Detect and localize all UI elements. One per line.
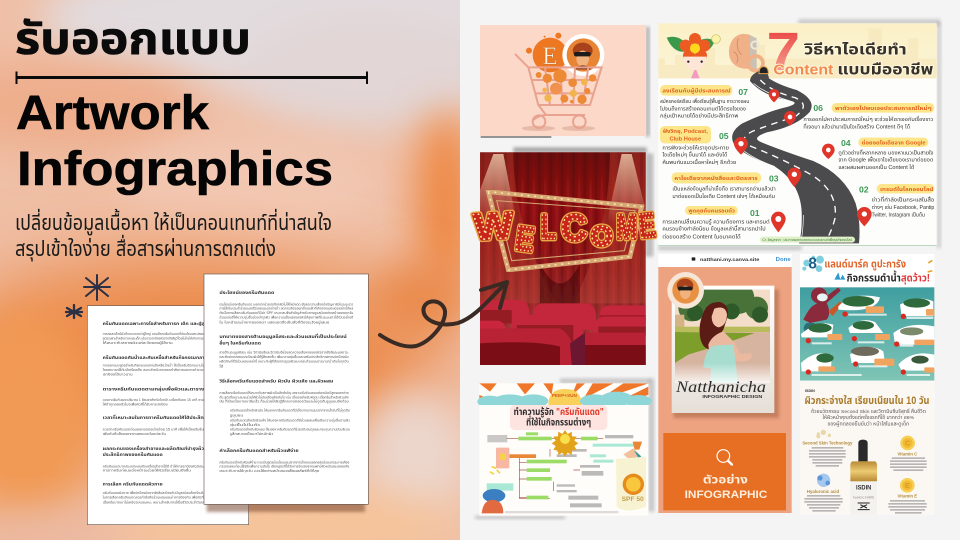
- document: right page: รูขุมขน: [229, 414, 243, 418]
- panel: island landmarks infographic: [800, 254, 934, 515]
- infographic title: Content: [773, 62, 833, 78]
- title box: ทำความรู้จัก "ครีมกันแดด": [514, 405, 604, 418]
- document: left page: [87, 306, 249, 525]
- welcome sign lettering: C: [561, 207, 587, 248]
- document: left page: การออกแบบสูตรสำหรับกิจกรรมกลางแจ้งหรือว่ายน้ำ ให้เนื้อครีมติดทนนานไม่หลุดง่าย: [103, 363, 216, 368]
- product: serum bottle: FLAVO-C FORTE: [853, 496, 874, 500]
- welcome sign lettering: E: [513, 219, 536, 260]
- source note: [760, 237, 855, 243]
- step 01: การแลกเปลี่ยนความรู้ ความต้องการ และเทรนด์: [662, 217, 770, 225]
- serum description: ของผู้ทดลองยืนยันว่า หน้าใสในและดูเด็ก: [827, 420, 909, 427]
- browser bar: Done: [776, 257, 791, 263]
- document: right page: ครีมกันแดดสำหรับผิวผสม ให้มองหาครีมกันแดดที่ช่วยปรับสมดุลและควบคุมความมันบริเวณ: [230, 426, 350, 431]
- feature: second skin: Second Skin Technology: [802, 441, 853, 446]
- big numeral 7: 7: [767, 23, 800, 82]
- icon: avatar badge: [562, 34, 604, 76]
- script name: Natthanicha: [675, 379, 766, 396]
- step 04: ต่อยอดไอเดียจาก Google: [862, 139, 926, 147]
- orange call-to-action box: ตัวอย่าง: [703, 474, 748, 487]
- serum description: [811, 408, 926, 427]
- document: right page: นั้น ที่เป็นเนื้อบางเบาซึมเร็ว ก็จะช่วยให้ผิวรู้สึกสบายตลอดวันและไม่อุดตันรูขุมขนอีกด้วย: [219, 399, 349, 404]
- welcome sign lettering: E: [637, 206, 657, 246]
- marquee frame: [488, 192, 642, 270]
- icon: sun with UV label: [552, 430, 578, 457]
- step 04: [838, 138, 934, 171]
- step 05: Club House: [669, 136, 701, 142]
- document: right page: และยังช่วยปลอบประโลมผิวให้รู้สึกสดชื่น เพิ่มความชุ่มชื้นและเสริมประสิทธิภาพการปกป้องผิว: [219, 354, 349, 359]
- step 03: เป็นแหล่งข้อมูลที่น่าเชื่อถือ เราสามารถอ่านแล้วนำ: [672, 185, 776, 193]
- document: left page: เวลาที่เหมาะสมในการทาครีมกันแดดให้ได้ประสิทธิภาพ: [103, 414, 217, 420]
- panel: cart illustration: [480, 25, 650, 138]
- document: left page: ตารางครีมกันแดดตามกลุ่มเพื่อผิวและตารางทาซ้ำ: [103, 385, 216, 393]
- welcome sign lettering: W: [473, 205, 514, 248]
- avatar badge: [667, 272, 704, 309]
- panel: serum product infographic: [800, 381, 934, 515]
- document: left page: การทาครีมก่อนแต่งหน้าจะช่วยให้ผิวเรียบเนียนยิ่งขึ้น: [103, 468, 191, 473]
- document: left page: ประสิทธิภาพของครีมกันแดด: [103, 451, 163, 457]
- step 04: 04: [841, 138, 851, 148]
- step 04: จาก Google เพื่อเอาไอเดียของเรามาต่อยอด: [838, 156, 933, 164]
- feature: vitamin E: E: [905, 481, 910, 490]
- step 02: Twitter, Instagram เป็นต้น: [872, 212, 925, 219]
- step 02: เทรนด์ในโลกออนไลน์: [880, 187, 934, 193]
- browser bar: natthani.my.canva.site: [700, 257, 760, 262]
- step 03: หาไอเดียจากหนังสือและนิตยสาร: [674, 175, 758, 182]
- document: right page: สารต้านอนุมูลอิสระ เช่น วิตามินซีและวิตามินอีช่วยลดความเสียหายของผิวจากรังสีและมลภาวะ: [219, 350, 349, 354]
- document: left page: ทารกและเด็กมีผิวที่บอบบางกว่าผู้ใหญ่ ควรเลือกครีมกันแดดที่อ่อนโยนและปลอดภัยต่อผิว: [103, 331, 216, 336]
- orange call-to-action box: [663, 433, 786, 510]
- document: right page: ประโยชน์ของครีมกันแดด นอกจากช่วยปกป้องผิวไม่ให้ไหม้แดด ยังลดความเสี่ยงต่อปัญหาผิวในระยะยาว: [219, 301, 354, 306]
- welcome sign lettering: M: [616, 209, 637, 247]
- icon: large asterisk: [84, 275, 110, 300]
- step 05: ค้นพบกับแนวเนื้อหาใหม่ๆ อีกด้วย: [662, 158, 736, 166]
- serum description: ด้วยนวัตกรรม Second Skin และวิตามินซีบริสุทธิ์ คืนชีวิต: [811, 408, 926, 415]
- step 07: ลงเรียนกับผู้มีประสบการณ์: [662, 87, 731, 94]
- diver: [803, 287, 843, 331]
- step 01: คนรอบข้างกำลังนิยม ข้อมูลเหล่านี้สามารถนำไป: [662, 225, 766, 233]
- document: right page: ดังนั้นการเลือกครีมกันแดดที่มีค่า SPF เหมาะสมจึงสำคัญสำหรับการดูแลผิวอย่างสม่ำเสมอทุกวัน: [219, 310, 353, 315]
- welcome sign lettering: L: [541, 209, 556, 247]
- document: right page: ครีมกันแดดสำหรับผิวแพ้ง่าย ควรเป็นสูตรอ่อนโยนและปราศจากน้ำหอมแอลกอฮอล์และสารระคายเคือง: [219, 459, 350, 464]
- arrow: curly arrow from documents to samples: [380, 282, 507, 346]
- footnote: [505, 511, 618, 513]
- step 02: [859, 184, 934, 219]
- document: left page: ปกป้องได้ยาวนาน: [103, 373, 133, 377]
- step 06: [803, 103, 934, 130]
- document: right page: ครีมกันแดดสำหรับผิวมัน ให้มองหาครีมกันแดดที่มีเนื้อบางเบาและปราศจากน้ำมันที่ไม่อุดตัน: [230, 408, 350, 413]
- step 05: [660, 126, 736, 166]
- islands title: 8: [808, 256, 817, 273]
- feature: vitamin C: C: [905, 439, 911, 448]
- document: left page: ให้ทำทุกสองชั่วโมงเพื่อผิวที่ได้รับการปกป้อง: [103, 402, 168, 407]
- browser bar: [692, 257, 791, 263]
- panel: blurred orange gradient background: [0, 0, 460, 540]
- welcome sign lettering: O: [591, 220, 612, 251]
- panel: serum product infographic: ISDIN: [805, 389, 815, 393]
- welcome sign lettering: W: [473, 205, 514, 248]
- step 06: การออกไปหาประสบการณ์ใหม่ๆ จะช่วยให้เราเจอกับเรื่องราว: [803, 115, 934, 123]
- panel: sunscreen mind map infographic: [475, 378, 654, 519]
- polaroid photo: [672, 282, 779, 418]
- step 05: 05: [719, 131, 729, 141]
- document: right page: ใน ใบหน้าและร่างกายของเรา แสงแดดจึงเป็นสิ่งที่ต้องระวังอยู่เสมอ: [219, 319, 330, 324]
- islands title: แลนด์มาร์ค ดูปะการัง: [824, 258, 906, 270]
- welcome sign lettering: E: [513, 219, 536, 260]
- document: right page: ชุ่มชื้นไปในตัว: [230, 422, 261, 427]
- step 06: ที่เจอมา แล้วนำมาเป็นไอเดียสร้าง Content ดีๆ ได้: [803, 122, 910, 130]
- step 07: กลุ่มเป้าหมายได้อย่างมีประสิทธิภาพ: [660, 113, 739, 120]
- welcome sign lettering: M: [616, 209, 637, 247]
- sea map: [800, 287, 934, 381]
- map pins: [734, 89, 872, 232]
- title: Infographics: Infographics: [17, 143, 333, 196]
- welcome sign lettering: L: [541, 209, 556, 247]
- document: left page: ผลกระทบของเครื่องสำอางและผลิตภัณฑ์บำรุงผิวที่ช่วย: [103, 444, 216, 452]
- step 07: 07: [738, 87, 748, 97]
- welcome sign lettering: C: [561, 207, 587, 248]
- step 01: พูดคุยกับคนรอบตัว: [688, 208, 735, 215]
- source note: Cr. ข้อมูลจาก : ประกาศผลงานออกแบบคอนเทนต์เพื่อธุรกิจออนไลน์: [762, 237, 852, 242]
- document: left page: ครีมกันแดดกันน้ำและกันเหงื่อสำหรับกิจกรรมกลางแจ้ง: [103, 354, 217, 360]
- panel: sunscreen mind map infographic: PEEP+SUN: [552, 393, 577, 398]
- bubbles: [802, 256, 824, 272]
- document: left page: ควรทาครีมกันแดดปริมาณ 1 ช้อนชาสำหรับใบหน้า เครื่องทีแดด 15 นาที ตามคำแนะนำ: [103, 397, 217, 402]
- serum description: ให้ผิวหน้าคุณตั้งแต่ครั้งแรกที่ใช้ มากกว่า 86%: [822, 413, 915, 421]
- curtain: [480, 152, 646, 365]
- feature: vitamin C: Vitamin C: [897, 451, 917, 456]
- icon: SPF 50 bottle: [616, 457, 646, 510]
- step 01: [662, 206, 770, 240]
- document: left page: สูตรเฉพาะสำหรับทารกและเด็ก เน้นการปกป้องผิวจากรังสียูวีโดยไม่ก่อให้เกิดการระคายเคือง: [102, 335, 216, 340]
- feature: hyaluronic acid: Hyaluronic acid: [807, 489, 839, 494]
- document: left page: ในการเลือกครีมกันแดดควรคำนึงถึงส่วนผสมและค่าการป้องกัน เพื่อผิวที่เหมาะสม: [103, 495, 216, 500]
- step 07: ไปจนถึงการสร้างคอนเทนต์ได้ตรงใจของ: [659, 105, 746, 112]
- document: right page: ได้: [218, 364, 223, 368]
- sun rays: [479, 383, 648, 406]
- feature: vitamin E: [888, 478, 927, 514]
- step 06: พาตัวเองไปพบเจอประสบการณ์ใหม่ๆ: [835, 104, 932, 112]
- panel: portfolio card: [658, 254, 792, 513]
- islands title: [808, 256, 930, 284]
- feature: vitamin E: Vitamin E: [898, 494, 917, 499]
- islands title: กิจกรรมดำน้ำสุดว้าว!: [847, 269, 930, 284]
- document: right page: ส่วนผสมที่ให้ความชุ่มชื้นช่วยบำรุงผิว เพื่อความแข็งแรงของผิวให้สุขภาพดีในระยะยาวได้เป็นอย่างดี: [219, 315, 353, 320]
- welcome sign lettering: E: [637, 206, 657, 246]
- step 03: มาต่อยอดเป็นไอเดีย Content เจ๋งๆ ได้เหมือนกัน: [672, 193, 775, 200]
- document: right page: ครีมกันแดดสำหรับผิวแห้ง ให้มองหาครีมกันแดดที่มีส่วนผสมเพื่อเติมความชุ่มชื้นตามผิว: [230, 417, 350, 422]
- document: right page: เหมาะกับการใช้ทุกวัน ควรใช้อย่างสม่ำเสมอเพื่อผลลัพธ์ที่ดีที่สุด: [219, 468, 319, 473]
- step 06: 06: [813, 103, 823, 113]
- skyline: [658, 28, 937, 78]
- icon: small asterisk: [66, 305, 82, 318]
- welcome sign lettering: E: [637, 206, 657, 246]
- welcome sign lettering: O: [591, 220, 612, 251]
- welcome sign lettering: C: [561, 207, 587, 248]
- step 04: และผสมผสานออกเป็น Content ได้: [838, 164, 914, 171]
- subtitle text: [15, 208, 332, 262]
- step 01: 01: [750, 208, 760, 218]
- icon: orange E badge: E: [542, 42, 558, 70]
- document: right page: คำเลือกครีมกันแดดสำหรับผิวแพ้ง่าย: [219, 446, 299, 453]
- icon: brain and gears: [729, 34, 763, 71]
- document: right page: ประโยชน์ของครีมกันแดด: [219, 289, 275, 295]
- icon: magnifier: [717, 450, 732, 465]
- clouds: [477, 392, 652, 408]
- infographic title: [773, 42, 934, 78]
- document: left page: เพิ่มกันที่แข็งแรงจากแสงแดดในแต่ละวัน: [103, 431, 166, 436]
- infographic title: แบบมืออาชีพ: [837, 62, 934, 78]
- step 04: ดูตัวอย่างที่หลากหลาย มองหาแนวเป็นสายใจ: [838, 148, 934, 156]
- document: left page: เนื้อครีมบางเบาไม่เหนียวเหนอะหนะ เหมาะสำหรับการใช้ในชีวิตประจำวันของทุกคน: [103, 499, 216, 504]
- document: right page: รูสึกสบายเนื้อเบาไม่หนักผิว: [229, 431, 274, 436]
- step 02: ต่างๆ เช่น Facebook, Pantip: [872, 204, 934, 211]
- step 07: [659, 85, 749, 120]
- title box: [510, 405, 607, 430]
- panel: 7 content ideas road infographic: [658, 19, 941, 250]
- subtitle text: เปลี่ยนข้อมูลเนื้อหา ให้เป็นคอนเทนท์ที่น่าสนใจ: [15, 208, 332, 236]
- document: left page: ครีมกันแดดบางประเภทผสมกับเครื่องสำอางได้ดี ทำให้การปกป้องผิวมีประสิทธิภาพ: [103, 463, 217, 468]
- document: right page: อื่นๆ ในครีมกันแดด: [219, 340, 261, 346]
- document: right page: [204, 274, 368, 512]
- document: right page: บทบาทของสารต้านอนุมูลอิสระและส่วนผสมที่เป็นประโยชน์: [219, 332, 347, 340]
- icon: SPF 50 bottle: SPF 50: [622, 496, 644, 503]
- document: right page: การเลือกครีมกันแดดให้เหมาะกับสภาพผิวเป็นสิ่งสำคัญ เพราะครีมกันแดดแต่ละชนิดมีสูตรแตกต่าง: [219, 390, 349, 395]
- step 02: ข่าวที่กำลังเป็นกระแสในสื่อ: [872, 196, 934, 204]
- mind map: [487, 432, 634, 507]
- document: right page: วิธีเลือกครีมกันแดดสำหรับ ผิวมัน ผิวแห้ง และผิวผสม: [219, 378, 334, 384]
- step 03: [672, 172, 779, 200]
- document: right page: การใช้เป็นประจำช่วยชะลอริ้วรอยและจุดด่างดำ ลดการเกิดรอยคล้ำและฝ้าที่เกิดจากแสงแดดอย่างได้ผล: [219, 306, 354, 311]
- panel: welcome theatre: [480, 147, 653, 365]
- welcome sign lettering: E: [513, 219, 536, 260]
- icon: sunscreen tube: [490, 448, 509, 474]
- title: รับออกแบบ: รับออกแบบ: [15, 15, 251, 64]
- feature: vitamin C: [890, 436, 927, 471]
- document: right page: ผลิตภัณฑ์ที่มีส่วนผสมเหล่านี้ เหมาะกับผู้ที่ต้องการดูแลผิวแบบครบถ้วนและยาวนานกว่าเดิมในทุกวัน: [219, 359, 349, 364]
- document: left page: ควรทาครีมกันแดดก่อนออกแดดอย่างน้อย 15 นาที เพื่อให้เนื้อครีมซึมสู่ผิวได้ดี: [103, 427, 216, 432]
- title: Artwork: Artwork: [16, 87, 209, 140]
- woman figure: [700, 302, 752, 383]
- road: [732, 67, 860, 243]
- step 05: ไอเดียใหม่ๆ ขึ้นมาได้ และยังได้: [661, 151, 727, 159]
- document: left page: ครีมกันแดดผิวกาย เพื่อปกป้องผิวจากรังสีและป้องกันปัญหาผิวแห้งกร้านในระยะยาว: [103, 490, 216, 495]
- step 02: 02: [859, 184, 869, 194]
- icon: lady with hat: [482, 489, 505, 513]
- orange call-to-action box: INFOGRAPHIC: [685, 489, 767, 501]
- document: left page: ครีมกันแดดเฉพาะทางโอสำหรับทารก เด็ก และผู้สูงอายุ: [103, 320, 216, 327]
- serum headline: ผิวกระจ่างใส เรียบเนียนใน 10 วัน: [804, 394, 929, 407]
- document: left page: ให้เหมาะกับสภาพผิวแต่ละวัยของผู้ใช้งาน: [103, 341, 173, 345]
- document: left page: การเลือก ครีมกันแดดผิวกาย: [103, 481, 163, 487]
- title box: ที่ใช้ในกิจกรรมต่างๆ: [526, 415, 591, 429]
- seats: [480, 300, 646, 365]
- icon: shopping cart: [515, 54, 602, 128]
- divider bar with end caps: [16, 72, 368, 84]
- welcome sign lettering: W: [473, 205, 514, 248]
- infographic title: วิธีหาไอเดียทำ: [804, 42, 907, 58]
- islands: [801, 296, 934, 371]
- step 01: ต่อยอดสร้าง Content ในอนาคตได้: [662, 233, 741, 240]
- cart dots: [536, 69, 596, 104]
- document: right page: ควรทดสอบก่อนใช้จริงเพื่อความมั่นใจ เลือกสูตรที่ได้รับการรับรองจากแพทย์ผิวหนังและปลอดภัย: [219, 464, 349, 469]
- step 07: สมัครคอร์สเรียน เพื่อเรียนรู้พื้นฐาน การวางแผน: [660, 97, 749, 105]
- product: serum bottle: ISDIN: [856, 486, 871, 492]
- step 03: 03: [769, 174, 779, 184]
- step 05: ฟังวิทยุ, Podcast,: [663, 128, 708, 135]
- welcome sign lettering: O: [591, 220, 612, 251]
- caption: INFOGRAPHIC DESIGN: [702, 394, 762, 399]
- icon: flower character: [667, 33, 720, 78]
- icon: runner: [623, 442, 642, 462]
- step 05: การฟังจะช่วยให้เราจุดประกาย: [662, 144, 729, 151]
- welcome sign lettering: M: [616, 209, 637, 247]
- document: left page: โดยสามารถใช้กับน้ำหรือเหงื่อ เหมาะสำหรับการออกกำลังกายและการทำงานกลางแจ้ง: [103, 367, 216, 372]
- welcome sign lettering: L: [541, 209, 556, 247]
- subtitle text: สรุปเข้าใจง่าย สื่อสารผ่านการตกแต่ง: [15, 234, 276, 262]
- spotlights: [480, 154, 646, 223]
- welcome sign lettering: [473, 205, 657, 260]
- document: right page: กัน สูตรที่เหมาะสมจะช่วยให้ผิวไม่มันหรือแห้งเกินไป เช่น เนื้อเจลสำหรับผิวมัน เนื้อครีมสำหรับผิวแห้ง: [219, 394, 349, 399]
- product: serum bottle: [850, 440, 877, 515]
